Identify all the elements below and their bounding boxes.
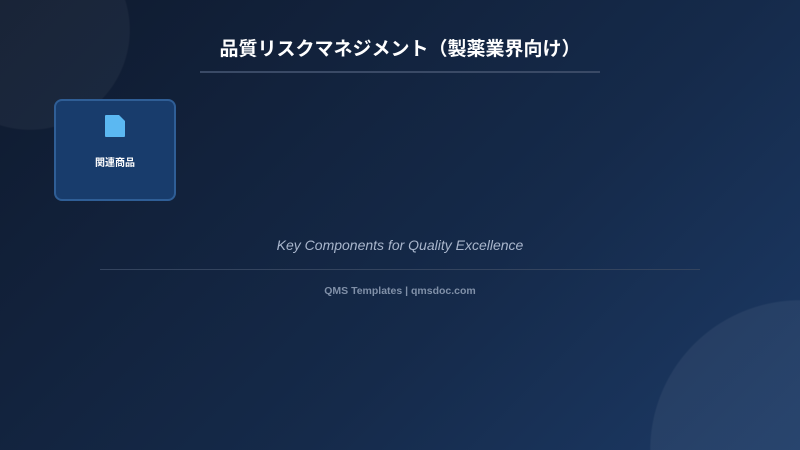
title: 品質リスクマネジメント（製薬業界向け）: [219, 39, 580, 60]
icon: document: [105, 115, 125, 137]
card label: 関連商品: [95, 158, 135, 169]
card: related products: [54, 99, 176, 201]
footer: QMS Templates | qmsdoc.com: [324, 285, 476, 297]
subtitle: Key Components for Quality Excellence: [277, 237, 523, 253]
